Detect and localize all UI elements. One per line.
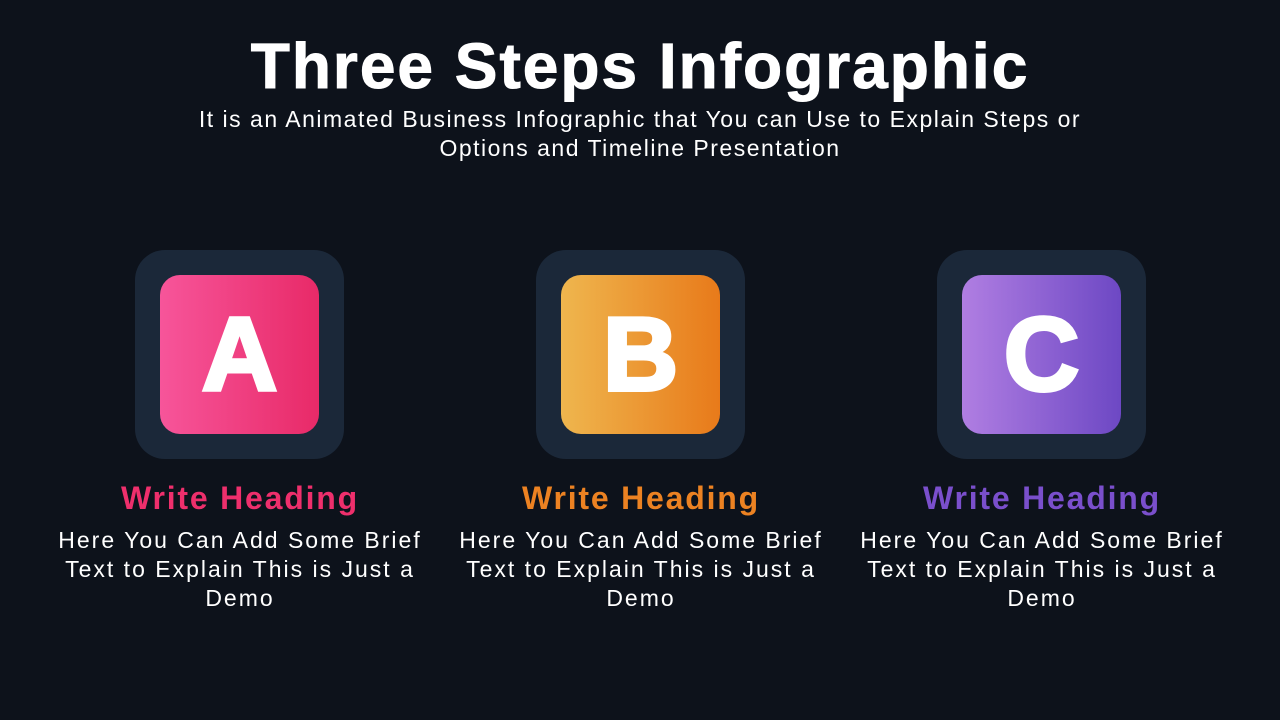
text B: Here You Can Add Some Brief [459,527,823,553]
step C [860,250,1224,611]
text A [58,527,422,611]
text C [860,527,1224,611]
heading B: Write Heading [522,480,760,516]
subtitle: It is an Animated Business Infographic that You can Use to Explain Steps or [199,106,1081,132]
subtitle [199,106,1081,161]
text C: Text to Explain This is Just a [867,556,1217,582]
text A: Here You Can Add Some Brief [58,527,422,553]
icon: C box [937,250,1146,459]
icon: B box [536,250,745,459]
step A [58,250,422,611]
text A: Text to Explain This is Just a [65,556,415,582]
text B [459,527,823,611]
text B: Text to Explain This is Just a [466,556,816,582]
text B: Demo [606,585,676,611]
heading C: Write Heading [923,480,1161,516]
text C: Demo [1007,585,1077,611]
text A: Demo [205,585,275,611]
heading A: Write Heading [121,480,359,516]
step B [459,250,823,611]
text C: Here You Can Add Some Brief [860,527,1224,553]
subtitle: Options and Timeline Presentation [439,135,841,161]
icon: B box: B [603,296,678,412]
icon: A box: A [202,296,277,412]
icon: A box [135,250,344,459]
title: Three Steps Infographic [251,30,1029,102]
icon: C box: C [1004,296,1079,412]
